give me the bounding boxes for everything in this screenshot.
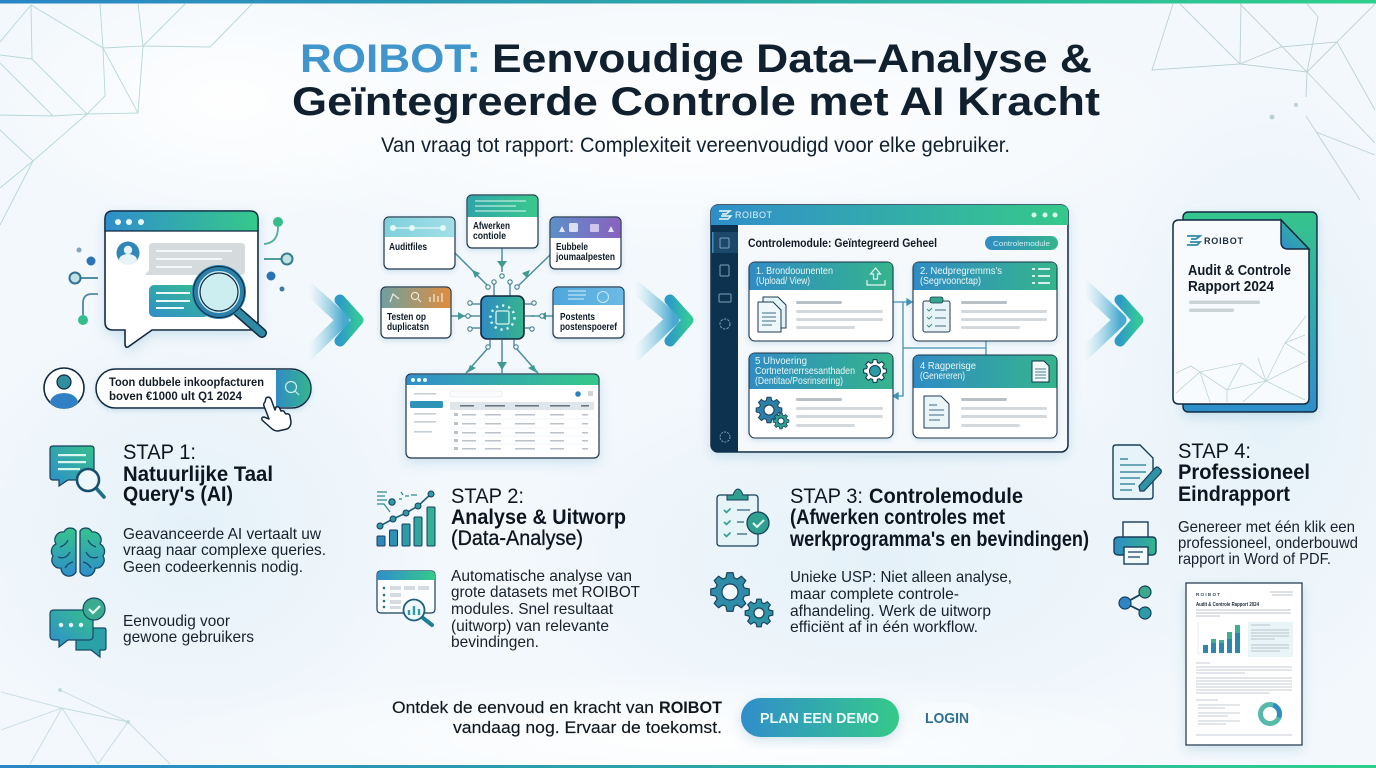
window brand	[719, 210, 772, 220]
call to action text: vandaag nog. Ervaar de toekomst.	[453, 719, 722, 737]
back cover	[1183, 212, 1317, 412]
step 2 description: modules. Snel resultaat	[451, 601, 614, 618]
preview body text	[1196, 663, 1292, 735]
query text: Toon dubbele inkoopfacturen	[109, 375, 264, 389]
user avatar	[44, 368, 84, 409]
button: login: LOGIN	[925, 710, 969, 727]
icon: printer	[1114, 522, 1156, 564]
connector arrows to hub	[451, 248, 553, 373]
top accent bar	[0, 0, 1376, 4]
step 1 note: Eenvoudig voor	[123, 613, 231, 630]
cover title: Audit & Controle	[1188, 263, 1291, 279]
bottom accent bar	[0, 765, 1376, 768]
step 3 heading	[789, 484, 1089, 551]
step 4 description: rapport in Word of PDF.	[1178, 551, 1331, 568]
step 3 heading: werkprogramma's en bevindingen)	[789, 527, 1089, 551]
search input with query	[96, 369, 311, 408]
step 3 heading: STAP 3:	[790, 484, 863, 508]
card: Eubbele journaalposten: Eubbele	[556, 241, 588, 253]
folded corner	[1281, 220, 1309, 249]
icon: document with pen	[1113, 445, 1161, 499]
front page	[1173, 220, 1309, 404]
chat window	[105, 211, 258, 347]
cover logo: ROIBOT	[1204, 236, 1244, 246]
step 3 description	[790, 569, 1012, 636]
report preview page	[1186, 583, 1302, 745]
step 1 description: vraag naar complexe queries.	[123, 542, 326, 559]
title: Geïntegreerde Controle met AI Kracht	[292, 80, 1100, 124]
call to action text	[392, 699, 722, 737]
card 3: Uitvoering	[749, 353, 893, 438]
icon: gears	[711, 573, 773, 627]
step 3 description: Unieke USP: Niet alleen analyse,	[790, 569, 1012, 586]
results dashboard	[406, 374, 599, 458]
step 4 heading: STAP 4:	[1178, 439, 1251, 463]
step 4 heading	[1178, 439, 1310, 506]
card 2: Werkprogramma's: (Segrvoonctap)	[920, 276, 981, 287]
step 1 description	[123, 526, 326, 576]
step 4 description: Genereer met één klik een	[1178, 519, 1355, 536]
preview donut chart	[1258, 702, 1282, 726]
window frame	[711, 205, 1068, 452]
card: Eubbele journaalposten: joumaalpesten	[555, 251, 615, 263]
cover title: Rapport 2024	[1188, 279, 1274, 295]
preview intro lines	[1196, 592, 1293, 616]
title: Eenvoudige Data–Analyse &	[492, 37, 1092, 81]
sidebar icons	[719, 238, 731, 442]
step 1 description: Geen codeerkennis nodig.	[123, 559, 303, 576]
step 2 description: (uitworp) van relevante	[451, 618, 609, 635]
step 2 heading	[451, 484, 626, 550]
icon: share	[1119, 586, 1151, 619]
window brand: ROIBOT	[735, 210, 772, 220]
card: Testen op duplicaten: duplicatsn	[387, 321, 429, 333]
card: Afwerken contiole: contiole	[473, 230, 506, 242]
card 4: Rapportage	[913, 355, 1057, 438]
card 3: Uitvoering: 5 Uhvoering	[755, 356, 807, 367]
cover title	[1188, 263, 1291, 295]
step 2 heading: (Data-Analyse)	[451, 526, 583, 550]
title	[292, 37, 1100, 124]
card 2: Werkprogramma's: 2. Nedpregremms's	[920, 266, 1002, 277]
card: Postents postenspoeref	[553, 287, 624, 338]
card 2: Werkprogramma's	[913, 262, 1057, 341]
icon: chat with magnifier	[50, 446, 104, 497]
blue message bubble	[149, 285, 209, 317]
card: Eubbele journaalposten	[550, 217, 621, 269]
call to action text: Ontdek de eenvoud en kracht van	[392, 699, 654, 717]
card: Testen op duplicaten	[381, 287, 451, 338]
grey message bubble	[145, 243, 245, 275]
step 1 note	[123, 613, 254, 646]
status pill: Controlemodule	[993, 239, 1050, 248]
step 2 heading: Analyse & Uitworp	[451, 505, 626, 529]
search button	[276, 370, 310, 407]
step 1 note: gewone gebruikers	[123, 629, 254, 646]
button: login	[913, 703, 982, 737]
card 4: Rapportage: (Genereren)	[920, 371, 965, 382]
card 3: Uitvoering: Cortnetenerrsesanthaden	[755, 366, 855, 377]
icon: hand cursor	[262, 397, 291, 431]
step 2 description: bevindingen.	[451, 634, 539, 651]
window title: Controlemodule: Geïntegreerd Geheel	[748, 238, 937, 250]
button: plan een demo: PLAN EEN DEMO	[760, 710, 879, 727]
step 3 heading: Controlemodule	[869, 484, 1023, 508]
connectors between cards	[893, 299, 986, 399]
card 1: Brondocumenten: 1. Brondoounenten	[756, 266, 833, 277]
button: plan een demo	[741, 698, 899, 737]
card 1: Brondocumenten: (Upload/ View)	[756, 276, 810, 287]
query text	[109, 375, 264, 403]
cover logo	[1187, 236, 1244, 246]
card: Postents postenspoeref: postenspoeref	[560, 321, 617, 333]
card: Afwerken contiole: Afwerken	[473, 220, 510, 232]
card 4: Rapportage: 4 Ragperisge	[920, 361, 976, 372]
step 1 heading: STAP 1:	[123, 440, 196, 464]
step 1 heading: Query's (AI)	[123, 482, 233, 506]
cover subtitle lines	[1189, 300, 1260, 312]
cover network pattern	[1176, 316, 1307, 402]
call to action text: ROIBOT	[659, 699, 722, 717]
title: ROIBOT:	[300, 37, 481, 81]
card: Auditfiles	[384, 217, 455, 269]
preview side panel	[1248, 622, 1293, 657]
step 3 heading: (Afwerken controles met	[790, 505, 1005, 529]
window dots	[1032, 212, 1058, 218]
flow arrow 3	[1085, 287, 1138, 353]
card: Testen op duplicaten: Testen op	[387, 311, 426, 323]
connector nodes left and right	[70, 217, 292, 325]
central chip	[481, 296, 524, 339]
step 1 heading	[123, 440, 273, 506]
icon: clipboard with check	[717, 489, 769, 546]
icon: table with magnifier	[377, 571, 435, 625]
step 3 description: efficiënt af in één workflow.	[790, 619, 978, 636]
illustration: report cover	[1173, 212, 1317, 412]
step 1 description: Geavanceerde AI vertaalt uw	[123, 526, 321, 543]
step 2 description: Automatische analyse van	[451, 568, 632, 585]
step 1 heading: Natuurlijke Taal	[123, 462, 273, 486]
avatar in chat	[116, 242, 140, 265]
preview header: ROIBOT	[1196, 592, 1220, 597]
illustration: control module window	[711, 205, 1068, 452]
step 4 heading: Professioneel	[1178, 460, 1310, 484]
query text: boven €1000 ult Q1 2024	[109, 389, 242, 403]
step 3 description: maar complete controle-	[790, 586, 959, 603]
preview bar chart	[1198, 622, 1241, 654]
flow arrow 1	[309, 289, 358, 353]
icon: chat with check	[50, 598, 106, 657]
step 4 description: professioneel, onderbouwd	[1178, 535, 1358, 552]
step 2 heading: STAP 2:	[451, 484, 524, 508]
subtitle: Van vraag tot rapport: Complexiteit vereenvoudigd voor elke gebruiker.	[381, 134, 1010, 157]
step 4 description	[1178, 519, 1358, 568]
card: Afwerken contiole	[467, 195, 538, 248]
status pill	[985, 236, 1058, 250]
card: Postents postenspoeref: Postents	[560, 311, 595, 323]
step 4 heading: Eindrapport	[1178, 482, 1290, 506]
card 3: Uitvoering: (Dentitao/Posrinsering)	[755, 376, 843, 387]
magnifier	[194, 266, 262, 333]
step 3 description: afhandeling. Werk de uitworp	[790, 603, 991, 620]
step 2 description: grote datasets met ROIBOT	[451, 584, 640, 601]
card 1: Brondocumenten	[749, 262, 893, 341]
illustration: step 1 chat window with magnifier	[70, 211, 292, 347]
icon: brain	[51, 528, 105, 576]
icon: growth chart	[377, 491, 435, 546]
card: Auditfiles: Auditfiles	[389, 241, 427, 253]
preview title: Audit & Controle Rapport 2024	[1196, 602, 1260, 608]
step 2 description	[451, 568, 640, 651]
flow arrow 2	[635, 287, 688, 355]
illustration: step 2 module hub	[381, 195, 624, 458]
